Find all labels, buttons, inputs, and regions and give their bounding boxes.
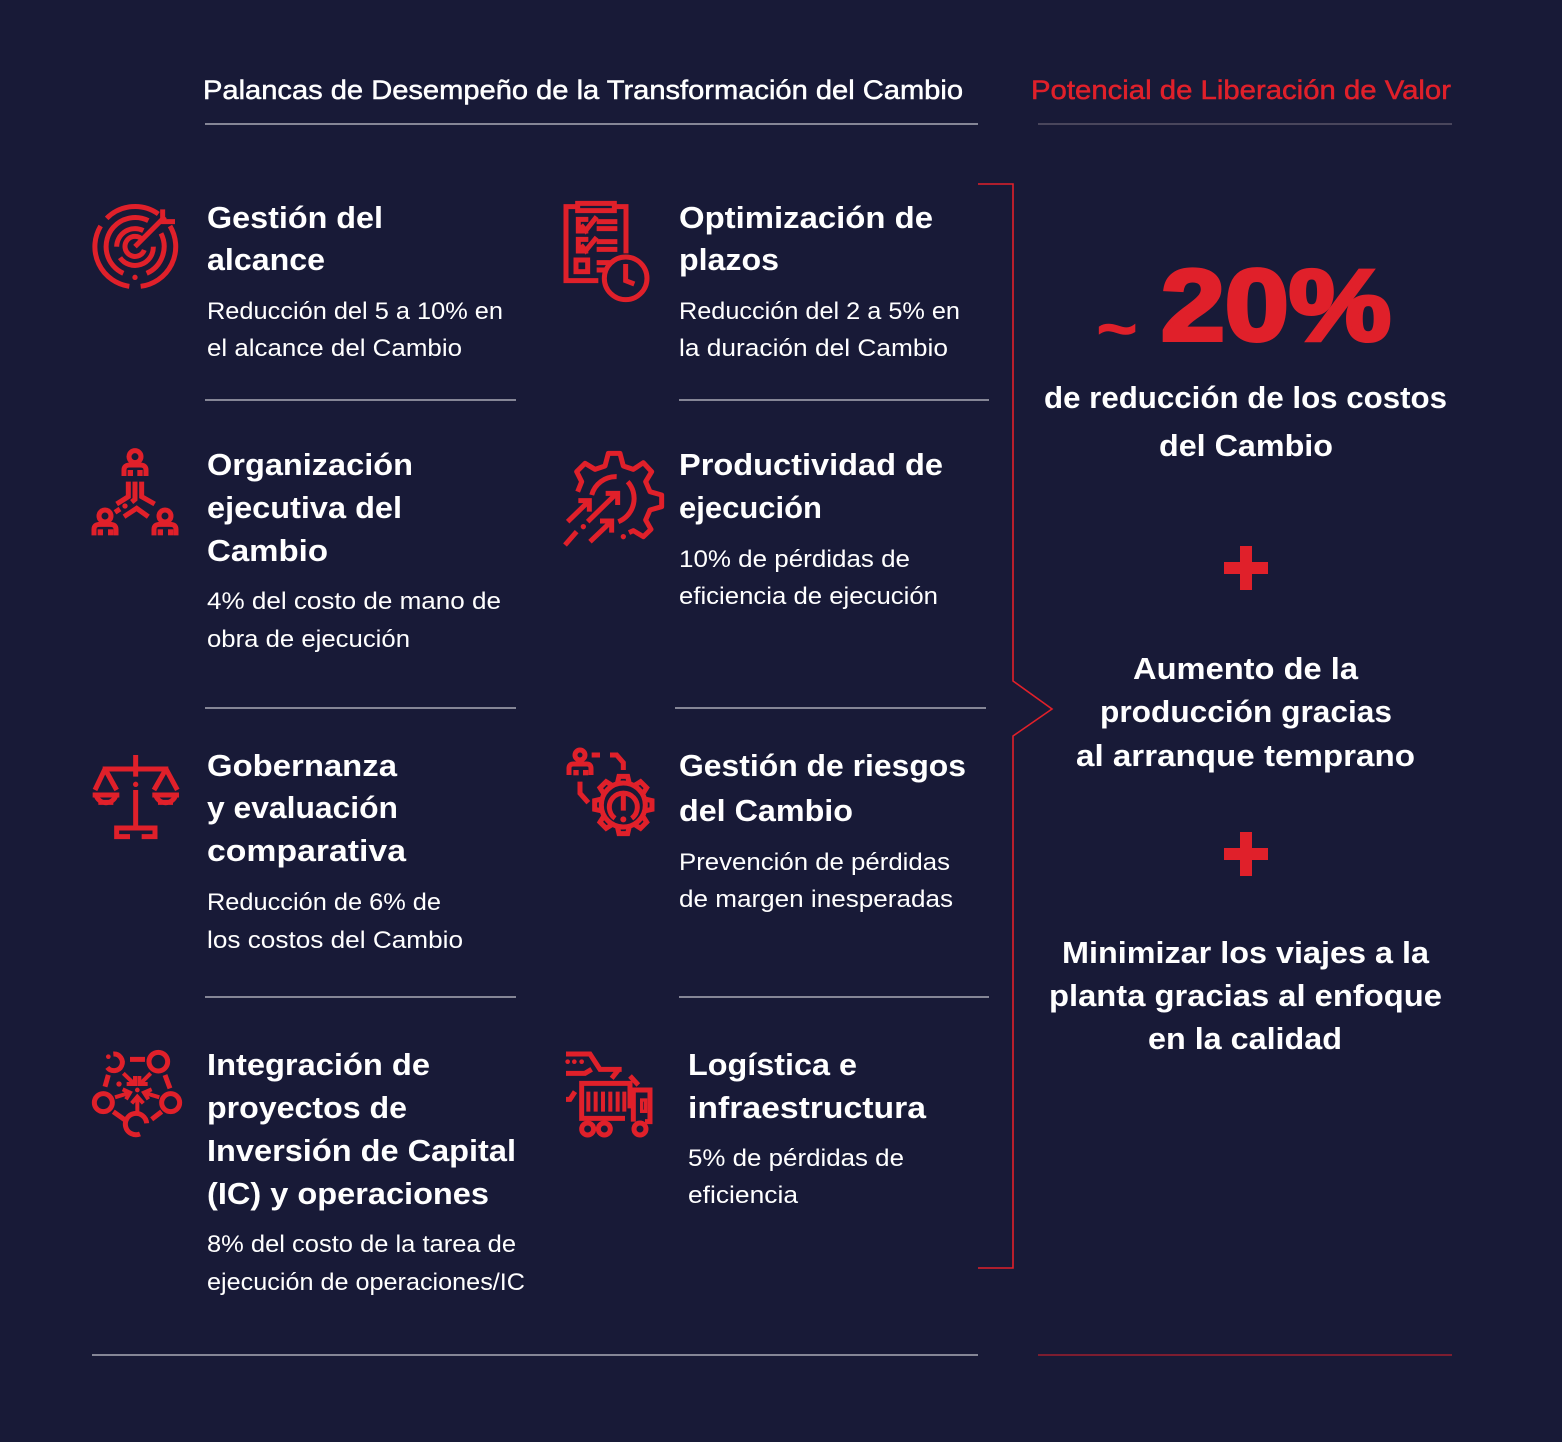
panel: value release: [1044, 250, 1447, 1056]
panel: executive organization: ejecutiva del: [207, 490, 402, 525]
panel: change risk management: [569, 748, 966, 913]
panel: executive organization: obra de ejecución: [207, 626, 410, 653]
panel: scope management: el alcance del Cambio: [207, 335, 462, 362]
title: Gobernanza: [207, 748, 398, 783]
text: minimize plant trips: [1049, 935, 1442, 1056]
icon: checklist with clock: [566, 203, 647, 300]
title: Gestión de riesgos: [679, 748, 966, 783]
description: 10% de pérdidas de: [679, 546, 910, 573]
panel: logistics and infrastructure: eficiencia: [688, 1182, 798, 1209]
panel: capital investment integration: ejecución de operaciones/IC: [207, 1269, 525, 1296]
description: 5% de pérdidas de: [688, 1145, 904, 1172]
text: cost reduction: del Cambio: [1159, 428, 1333, 463]
bracket arrow: [978, 184, 1052, 1268]
description: 4% del costo de mano de: [207, 588, 501, 615]
icon: plus: [1224, 832, 1268, 876]
panel: schedule optimization: [566, 200, 960, 362]
big number: 20 percent: 20%: [1161, 250, 1391, 362]
title: Gestión del: [207, 200, 383, 235]
panel: capital investment integration: proyectos de: [207, 1090, 407, 1125]
panel: governance and benchmarking: [93, 748, 463, 954]
icon: person and warning gear: [569, 750, 652, 834]
text: production increase: Aumento de la: [1133, 651, 1359, 686]
title: Integración de: [207, 1047, 430, 1082]
icon: converging network: [94, 1052, 180, 1135]
description: Prevención de pérdidas: [679, 849, 950, 876]
panel: executive organization: Cambio: [207, 533, 328, 568]
panel: schedule optimization: la duración del Cambio: [679, 335, 948, 362]
text: cost reduction: de reducción de los costos: [1044, 380, 1447, 415]
text: minimize plant trips: planta gracias al enfoque: [1049, 978, 1442, 1013]
icon: gear with arrows: [565, 453, 662, 545]
panel: execution productivity: ejecución: [679, 490, 822, 525]
panel: logistics and infrastructure: [565, 1047, 927, 1209]
text: minimize plant trips: en la calidad: [1148, 1021, 1342, 1056]
big number: 20 percent: [1097, 250, 1391, 362]
title: Organización: [207, 447, 413, 482]
heading: performance levers: Palancas de Desempeño de la Transformación del Cambio: [203, 75, 963, 105]
panel: logistics and infrastructure: infraestructura: [688, 1090, 927, 1125]
text: production increase: producción gracias: [1100, 694, 1392, 729]
description: 8% del costo de la tarea de: [207, 1231, 516, 1258]
panel: change risk management: de margen inesperadas: [679, 886, 953, 913]
big number: 20 percent: ~: [1097, 297, 1137, 362]
text: cost reduction: [1044, 380, 1447, 463]
panel: scope management: [95, 200, 503, 362]
panel: governance and benchmarking: y evaluación: [207, 790, 398, 825]
panel: execution productivity: [565, 447, 943, 610]
text: minimize plant trips: Minimizar los viajes a la: [1062, 935, 1430, 970]
panel: scope management: alcance: [207, 242, 325, 277]
panel: capital investment integration: [94, 1047, 525, 1296]
text: production increase: [1076, 651, 1415, 773]
panel: schedule optimization: plazos: [679, 242, 779, 277]
icon: target with arrow: [95, 207, 176, 286]
icon: plus: [1224, 546, 1268, 590]
icon: container truck: [565, 1054, 650, 1135]
panel: executive organization: [94, 447, 501, 653]
title: Optimización de: [679, 200, 933, 235]
icon: three connected people: [94, 451, 176, 535]
description: Reducción del 5 a 10% en: [207, 298, 503, 325]
panel: governance and benchmarking: comparativa: [207, 833, 407, 868]
title: Logística e: [688, 1047, 857, 1082]
panel: change risk management: del Cambio: [679, 793, 853, 828]
panel: capital investment integration: (IC) y operaciones: [207, 1176, 489, 1211]
panel: execution productivity: eficiencia de ejecución: [679, 583, 938, 610]
title: Productividad de: [679, 447, 943, 482]
description: Reducción del 2 a 5% en: [679, 298, 960, 325]
panel: governance and benchmarking: los costos del Cambio: [207, 927, 463, 954]
icon: balance scale: [93, 755, 179, 837]
text: production increase: al arranque temprano: [1076, 738, 1415, 773]
panel: capital investment integration: Inversión de Capital: [207, 1133, 516, 1168]
heading: value release potential: Potencial de Liberación de Valor: [1031, 75, 1451, 105]
description: Reducción de 6% de: [207, 889, 441, 916]
